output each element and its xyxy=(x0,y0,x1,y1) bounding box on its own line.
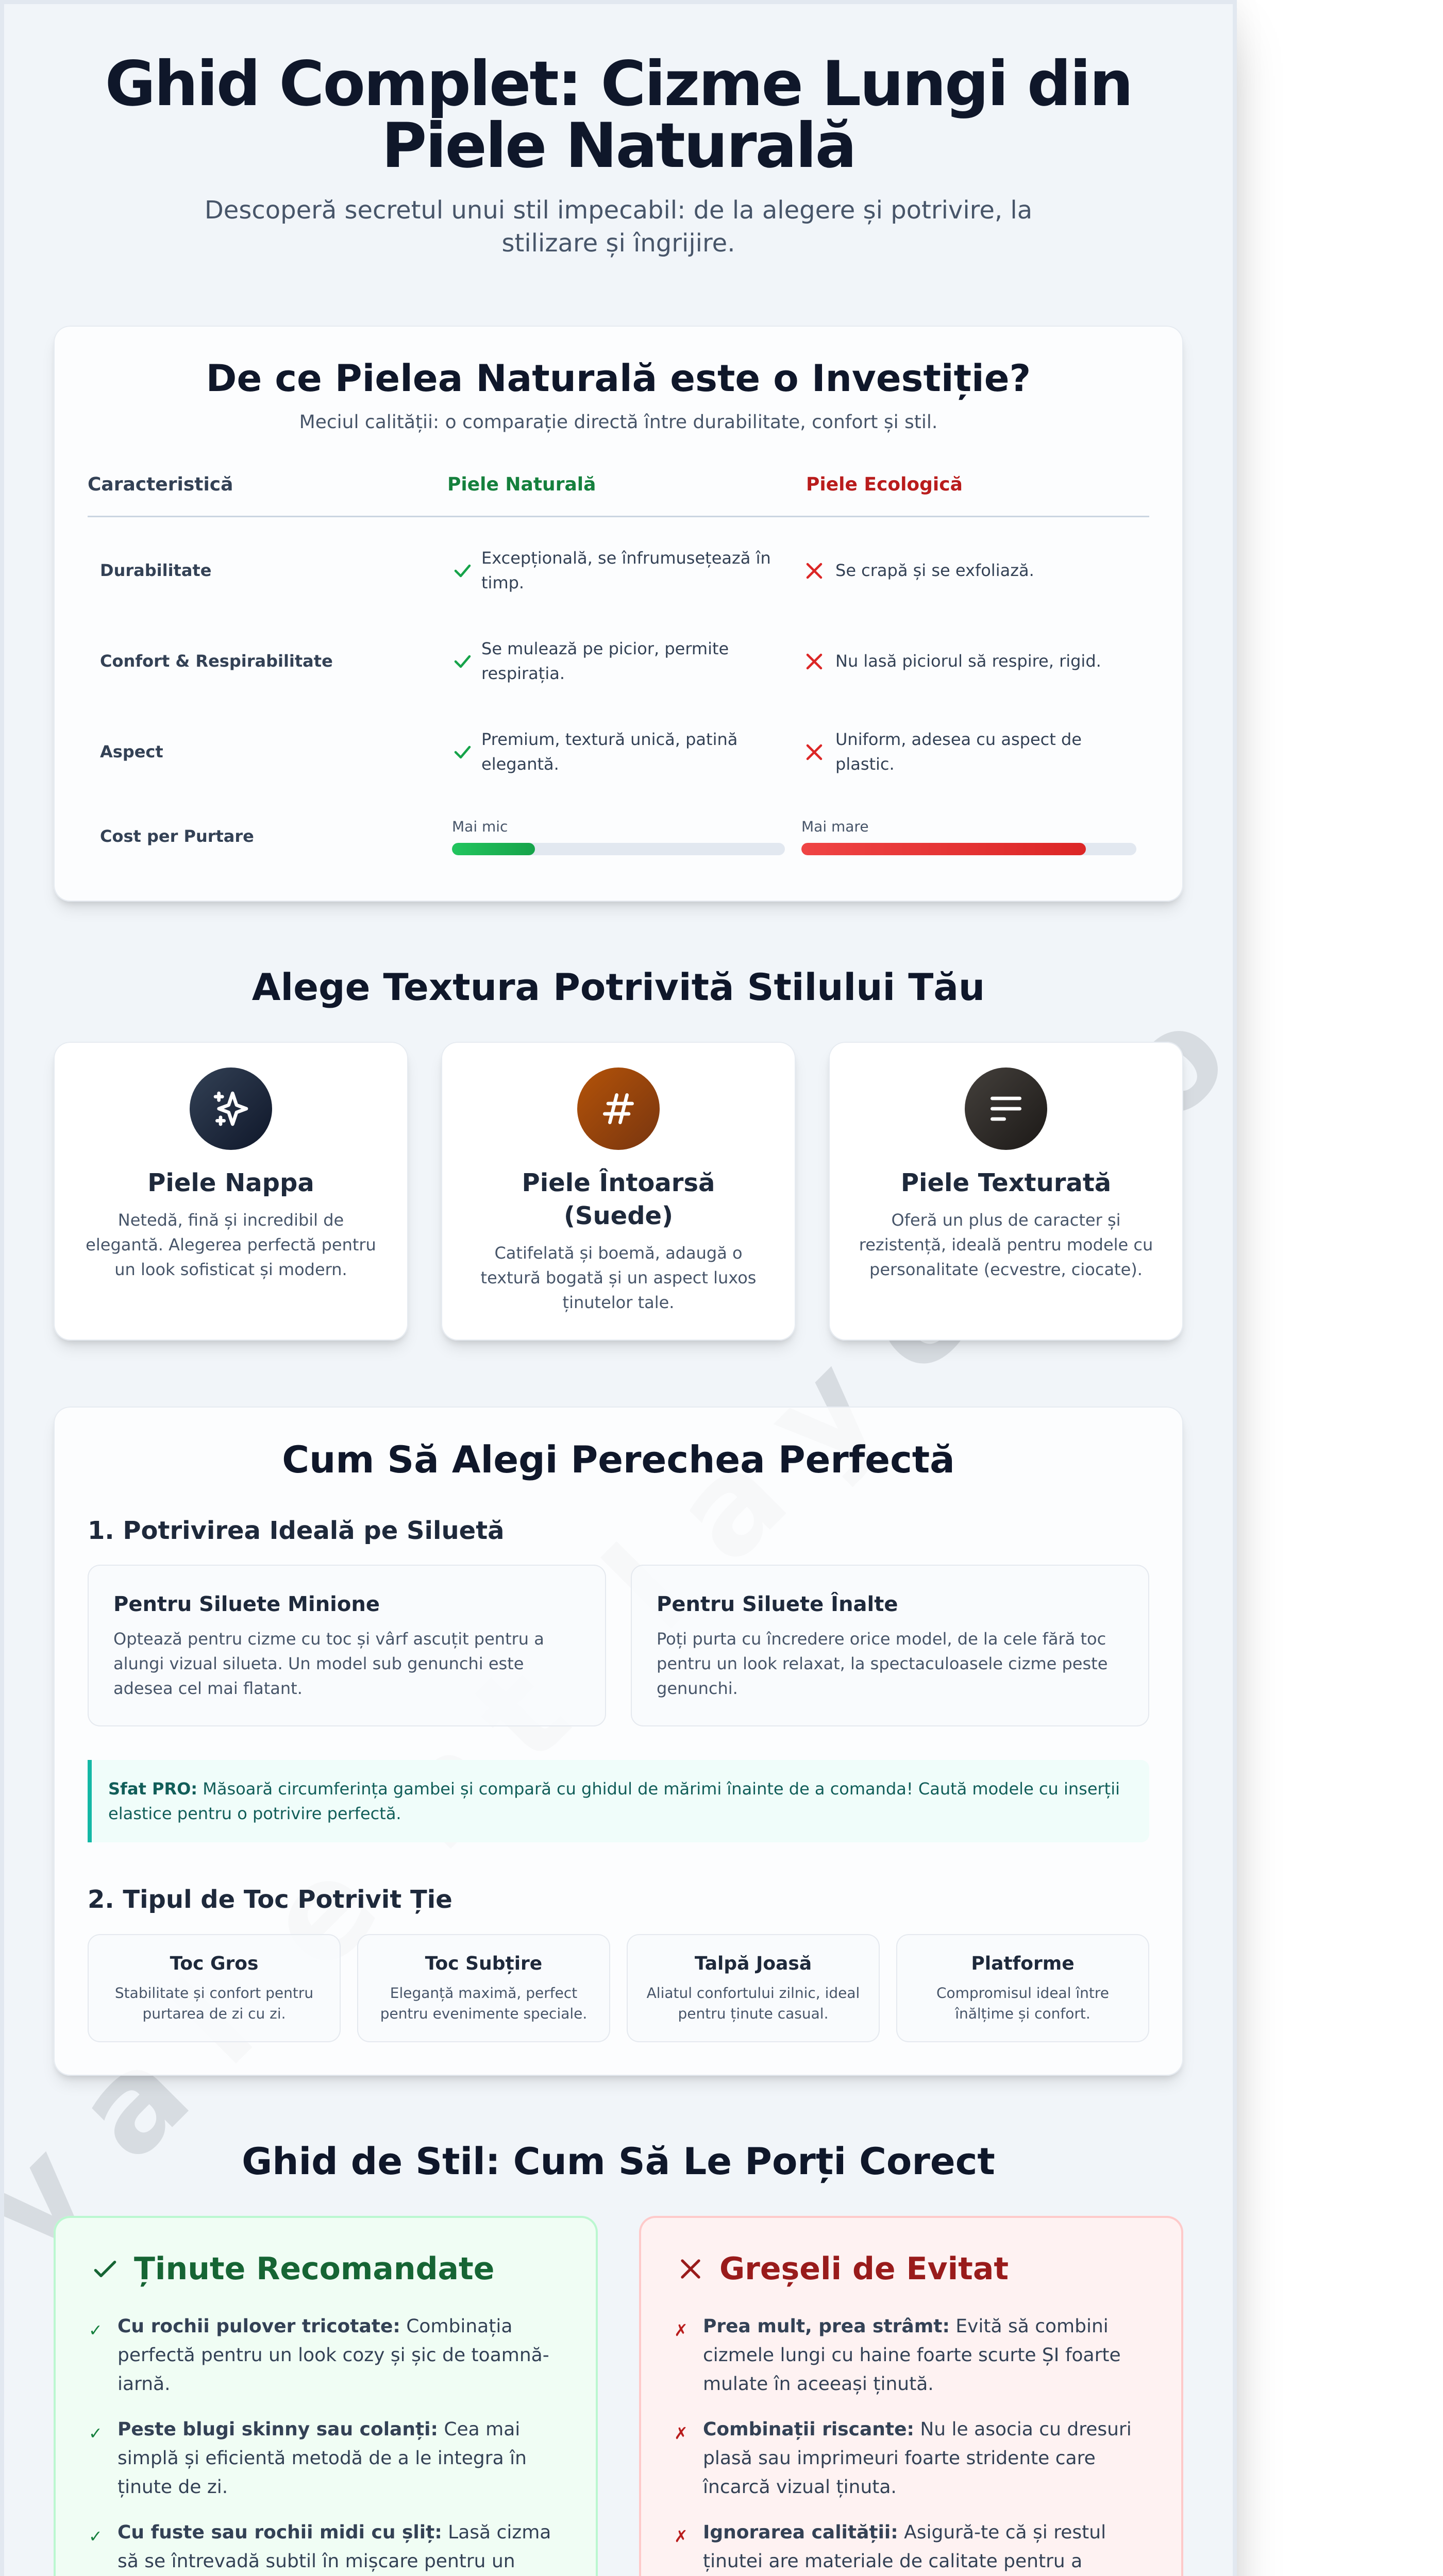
heel text: purtarea de zi cu zi. xyxy=(142,2005,286,2022)
icon: cross xyxy=(806,653,823,670)
panel: suede leather xyxy=(441,1042,796,1341)
list item: ținutei are materiale de calitate pentru a xyxy=(703,2551,1082,2572)
subtitle: stilizare și îngrijire. xyxy=(502,229,735,258)
bar: natural leather cost xyxy=(452,843,785,855)
panel title: Greșeli de Evitat xyxy=(719,2251,1009,2287)
sub-card: petite silhouettes xyxy=(88,1565,606,1726)
bullet: ✓ xyxy=(89,2424,103,2443)
heading: style guide: Ghid de Stil: Cum Să Le Porți Corect xyxy=(242,2140,995,2183)
list item: Prea mult, prea strâmt: Evită să combini xyxy=(703,2316,1109,2337)
list item: mulate în aceeași ținută. xyxy=(703,2374,934,2395)
heel text: înălțime și confort. xyxy=(955,2005,1090,2022)
card title xyxy=(522,1168,715,1230)
card description: rezistență, ideală pentru modele cu xyxy=(859,1235,1153,1255)
panel title: Ținute Recomandate xyxy=(134,2251,494,2287)
list item: plasă sau imprimeuri foarte stridente care xyxy=(703,2448,1096,2469)
table header: eco leather: Piele Ecologică xyxy=(806,474,963,495)
eco appearance text: plastic. xyxy=(835,754,895,774)
heel card: low sole xyxy=(627,1934,880,2042)
heel text: Compromisul ideal între xyxy=(936,1985,1109,2002)
icon: check xyxy=(455,565,471,577)
card description: Netedă, fină și incredibil de xyxy=(118,1210,344,1230)
sub-card text xyxy=(113,1629,544,1698)
heel title: Talpă Joasă xyxy=(695,1953,812,1974)
bullet: ✗ xyxy=(674,2527,688,2546)
title xyxy=(105,48,1132,182)
sub-card text: alungi vizual silueta. Un model sub genunchi este xyxy=(113,1654,524,1673)
heading: perfect pair: Cum Să Alegi Perechea Perfectă xyxy=(282,1438,955,1481)
table header: characteristic: Caracteristică xyxy=(88,474,233,495)
list item xyxy=(118,2312,549,2399)
sub-card text xyxy=(657,1629,1108,1698)
card description xyxy=(481,1243,756,1312)
heel text xyxy=(380,1985,587,2022)
natural comfort text xyxy=(481,639,729,683)
eco comfort text: Nu lasă piciorul să respire, rigid. xyxy=(835,651,1101,671)
bullet: ✗ xyxy=(674,2320,688,2340)
natural durability text: timp. xyxy=(481,573,524,592)
subtitle xyxy=(205,196,1032,258)
icon: check xyxy=(89,2252,122,2285)
list item: să se întrevadă subtil în mișcare pentru un xyxy=(118,2551,515,2572)
icon: cross xyxy=(674,2252,707,2285)
heel card: chunky xyxy=(88,1934,341,2042)
sub-card title: Pentru Siluete Înalte xyxy=(657,1592,898,1616)
card description: personalitate (ecvestre, ciocate). xyxy=(869,1260,1143,1279)
subheading: silhouette: 1. Potrivirea Ideală pe Siluetă xyxy=(88,1516,505,1545)
panel: recommended outfits xyxy=(54,2216,598,2576)
tip text xyxy=(108,1779,1120,1823)
list item xyxy=(118,2518,551,2576)
list item: simplă și eficientă metodă de a le integra în xyxy=(118,2448,527,2469)
icon: check xyxy=(455,746,471,758)
heel text: pentru ținute casual. xyxy=(678,2005,828,2022)
list item: Cu rochii pulover tricotate: Combinația xyxy=(118,2316,512,2337)
list item: Cu fuste sau rochii midi cu șliț: Lasă cizma xyxy=(118,2522,551,2543)
sub-card text: Optează pentru cizme cu toc și vârf ascuțit pentru a xyxy=(113,1629,544,1649)
bullet: ✓ xyxy=(89,2527,103,2546)
card description: un look sofisticat și modern. xyxy=(114,1260,347,1279)
row label: cost: Cost per Purtare xyxy=(100,826,254,846)
label: lower cost: Mai mic xyxy=(452,818,508,835)
card description: ținutelor tale. xyxy=(563,1293,674,1312)
bullet: ✓ xyxy=(89,2320,103,2340)
eco appearance text xyxy=(835,730,1082,774)
title: Piele Naturală xyxy=(381,110,855,182)
title: Ghid Complet: Cizme Lungi din xyxy=(105,48,1132,120)
label: higher cost: Mai mare xyxy=(801,818,869,835)
bullet: ✗ xyxy=(674,2424,688,2443)
sub-card title: Pentru Siluete Minione xyxy=(113,1592,380,1616)
subheading: heel type: 2. Tipul de Toc Potrivit Ție xyxy=(88,1885,452,1914)
heel text: Eleganță maximă, perfect xyxy=(390,1985,577,2002)
heel text xyxy=(627,1983,880,2024)
list item: cizmele lungi cu haine foarte scurte ȘI foarte xyxy=(703,2345,1121,2366)
row label: comfort: Confort & Respirabilitate xyxy=(100,651,333,671)
heel text xyxy=(896,1983,1149,2024)
icon: cross xyxy=(806,744,823,760)
card title: (Suede) xyxy=(564,1201,673,1230)
natural comfort text: respirația. xyxy=(481,664,565,683)
natural appearance text: Premium, textură unică, patină xyxy=(481,730,737,749)
tip text: elastice pentru o potrivire perfectă. xyxy=(108,1804,401,1823)
list item: perfectă pentru un look cozy și șic de toamnă- xyxy=(118,2345,549,2366)
panel: textured leather xyxy=(829,1042,1183,1341)
card description: Catifelată și boemă, adaugă o xyxy=(494,1243,743,1263)
callout: pro tip xyxy=(88,1760,1149,1842)
list item: ținute de zi. xyxy=(118,2477,228,2498)
natural durability text xyxy=(481,548,771,592)
list item xyxy=(703,2415,1132,2502)
icon: hash xyxy=(577,1067,660,1150)
card title: Piele Texturată xyxy=(901,1168,1111,1197)
natural appearance text: elegantă. xyxy=(481,754,559,774)
subtitle: Descoperă secretul unui stil impecabil: de la alegere și potrivire, la xyxy=(205,196,1032,225)
list item: Peste blugi skinny sau colanți: Cea mai xyxy=(118,2419,520,2440)
row label: appearance: Aspect xyxy=(100,742,163,761)
tip text: Sfat PRO: Măsoară circumferința gambei și compară cu ghidul de mărimi înainte de a comanda! Caută modele cu inserții xyxy=(108,1779,1120,1799)
heel title: Toc Gros xyxy=(170,1953,258,1974)
comparison subtitle: Meciul calității: o comparație directă între durabilitate, confort și stil. xyxy=(299,412,937,433)
icon: check xyxy=(455,655,471,668)
card description: textură bogată și un aspect luxos xyxy=(481,1268,756,1287)
heel text: Stabilitate și confort pentru xyxy=(115,1985,313,2002)
sub-card text: Poți purta cu încredere orice model, de la cele fără toc xyxy=(657,1629,1106,1649)
icon: cross xyxy=(806,563,823,579)
natural durability text: Excepțională, se înfrumusețează în xyxy=(481,548,771,568)
heel title: Toc Subțire xyxy=(425,1953,542,1974)
eco durability text: Se crapă și se exfoliază. xyxy=(835,561,1034,580)
natural comfort text: Se mulează pe picior, permite xyxy=(481,639,729,658)
sub-card text: pentru un look relaxat, la spectaculoasele cizme peste xyxy=(657,1654,1108,1673)
heel text: pentru evenimente speciale. xyxy=(380,2005,587,2022)
natural appearance text xyxy=(481,730,737,774)
card title: Piele Întoarsă xyxy=(522,1168,715,1197)
card title: Piele Nappa xyxy=(147,1168,314,1197)
heading: textures: Alege Textura Potrivită Stilului Tău xyxy=(252,965,985,1009)
table header: natural leather: Piele Naturală xyxy=(447,474,596,495)
panel: choosing the pair xyxy=(54,1406,1183,2076)
heading: investment: De ce Pielea Naturală este o Investiție? xyxy=(206,357,1031,400)
list item xyxy=(703,2518,1106,2576)
panel: comparison table xyxy=(54,326,1183,902)
card description: elegantă. Alegerea perfectă pentru xyxy=(86,1235,376,1255)
heel text xyxy=(115,1985,313,2022)
sub-card text: adesea cel mai flatant. xyxy=(113,1679,303,1698)
list item: iarnă. xyxy=(118,2374,171,2395)
eco appearance text: Uniform, adesea cu aspect de xyxy=(835,730,1082,749)
list item xyxy=(703,2312,1121,2399)
sub-card text: genunchi. xyxy=(657,1679,738,1698)
bar: eco leather cost xyxy=(801,843,1136,855)
card description xyxy=(86,1210,376,1279)
heel card: stiletto xyxy=(357,1934,610,2042)
card description: Oferă un plus de caracter și xyxy=(892,1210,1120,1230)
panel: mistakes to avoid xyxy=(639,2216,1183,2576)
row label: durability: Durabilitate xyxy=(100,561,211,580)
list item xyxy=(118,2415,527,2502)
list item: Combinații riscante: Nu le asocia cu dresuri xyxy=(703,2419,1132,2440)
sub-card: tall silhouettes xyxy=(631,1565,1149,1726)
heel title: Platforme xyxy=(971,1953,1075,1974)
panel: Nappa leather xyxy=(54,1042,408,1341)
card description xyxy=(859,1210,1153,1279)
heel card: platform xyxy=(896,1934,1149,2042)
icon: lines xyxy=(965,1067,1047,1150)
icon: sparkles xyxy=(190,1067,272,1150)
list item: Ignorarea calității: Asigură-te că și restul xyxy=(703,2522,1106,2543)
heel text: Aliatul confortului zilnic, ideal xyxy=(647,1985,860,2002)
list item: încarcă vizual ținuta. xyxy=(703,2477,897,2498)
